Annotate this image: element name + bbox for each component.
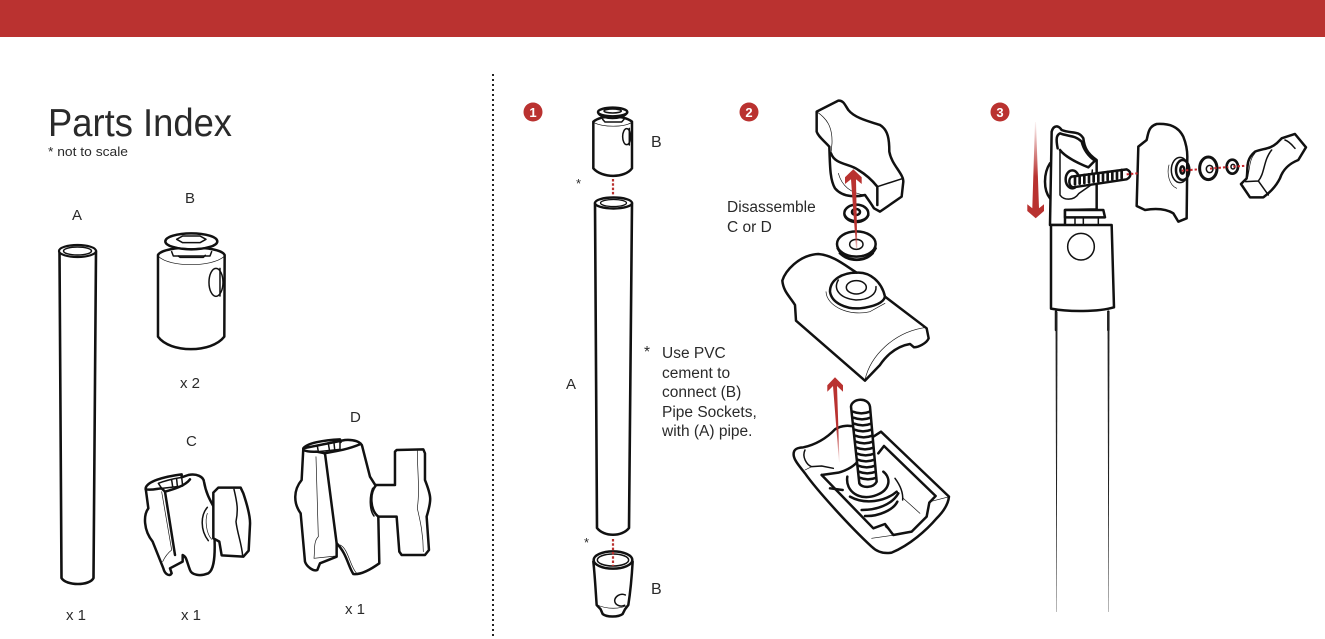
bottom pipe socket B [593,551,633,616]
cement note: cement to [662,365,730,382]
part A: A [72,207,82,224]
step badge 1 [524,102,542,122]
cement note: Use PVC [662,345,726,362]
step badge 3 [990,102,1010,122]
cement note: Pipe Sockets, [662,404,757,421]
step badge 3: 3 [996,105,1004,120]
panel: step 3 [990,102,1306,612]
vertical dotted divider [492,74,494,639]
disassemble note: Disassemble [727,199,816,216]
pipe A assembled [595,198,632,535]
part B [158,190,225,392]
part D [295,409,430,618]
header bar [0,0,1325,37]
label A: A [566,376,576,393]
part C: x 1 [181,607,201,624]
panel: step 2 [727,101,949,553]
part B: B [185,190,195,207]
exploded knob, washers and clamp plate [782,101,929,381]
part B: x 2 [180,375,200,392]
step badge 1: 1 [529,105,537,120]
cement note [644,344,757,440]
step badge 2: 2 [745,105,753,120]
part D: D [350,409,361,426]
label B top: B [651,134,662,151]
subtitle note: * not to scale [48,145,128,159]
panel: step 1 [524,102,757,616]
downward red arrow [1027,122,1044,218]
upper red arrow [845,169,862,248]
disassemble note: C or D [727,219,772,236]
asterisk bottom: * [584,535,589,550]
dotted connector top [612,179,614,196]
panel: parts index [48,102,430,624]
part C: C [186,433,197,450]
dotted connector bottom [612,539,614,566]
step badge 2 [740,102,758,122]
cement note: with (A) pipe. [661,423,752,440]
assembled mount and exploded parts [1045,124,1306,330]
lower red arrow [827,377,843,462]
threaded bolt base plate [794,400,949,553]
top pipe socket B [593,108,632,176]
title: Parts Index [48,102,232,145]
cement note: * [644,344,650,361]
cement note: connect (B) [662,384,741,401]
disassemble note [727,199,816,236]
part D: x 1 [345,601,365,618]
part A: x 1 [66,607,86,624]
label B bottom: B [651,581,662,598]
part A [59,207,96,624]
pole left edge [1056,312,1058,612]
pole right edge [1108,312,1110,612]
part C [145,433,250,624]
asterisk top: * [576,176,581,191]
